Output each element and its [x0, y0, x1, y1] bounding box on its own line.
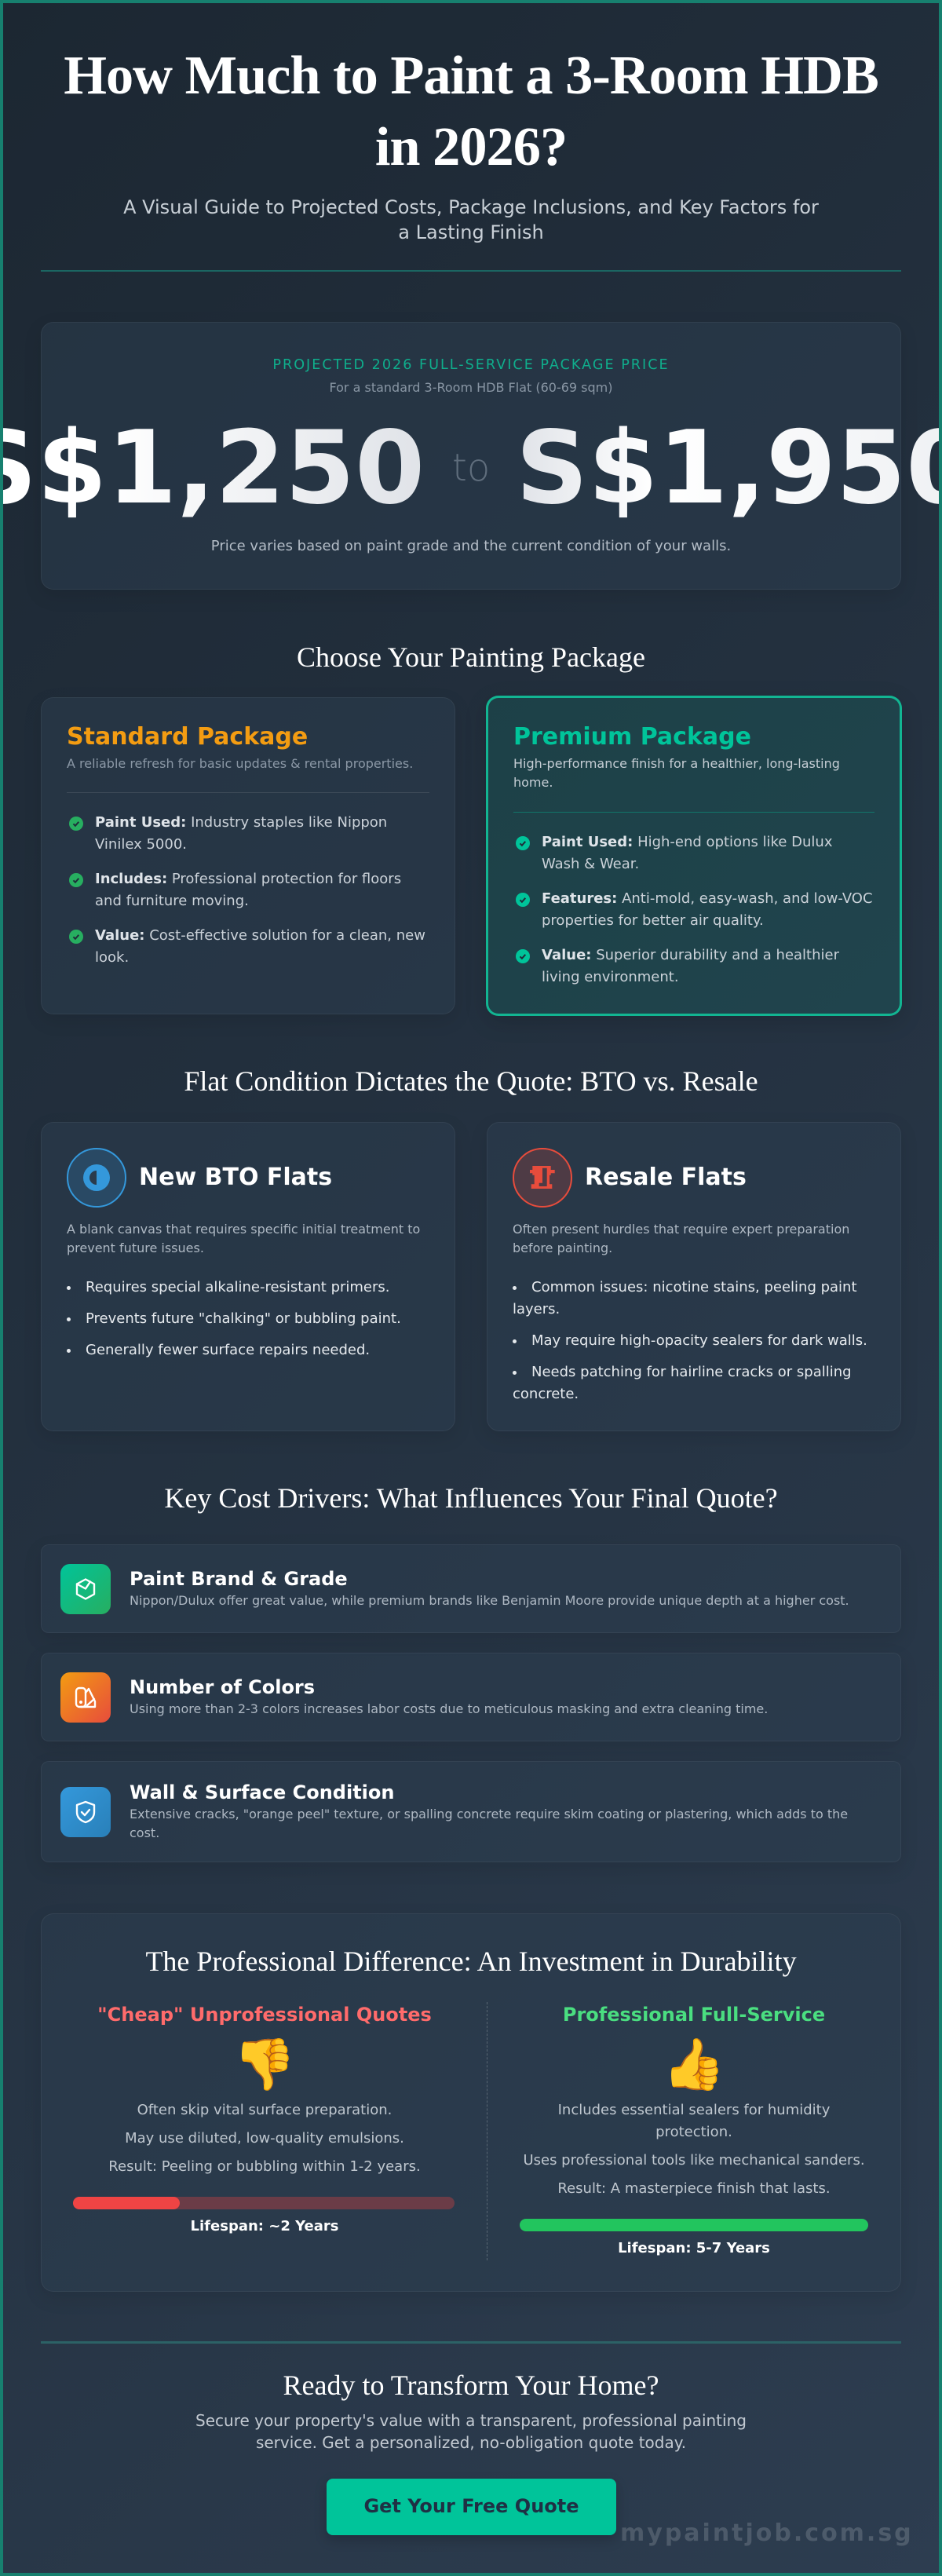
lifespan bar: 5 to 7 years [520, 2219, 868, 2231]
panel: paint brand driver [41, 1544, 901, 1633]
standard item: paint [95, 814, 387, 853]
professional points: Result: A masterpiece finish that lasts. [557, 2180, 831, 2197]
premium item: value [542, 947, 839, 985]
professional points: Includes essential sealers for humidity [558, 2102, 830, 2118]
professional column [520, 2004, 868, 2256]
wall condition title: Wall & Surface Condition [130, 1781, 394, 1803]
panel: wall condition driver [41, 1761, 901, 1862]
number of colors title: Number of Colors [130, 1676, 315, 1698]
premium item: paint: Paint Used: High-end options like Dulux [542, 834, 832, 850]
heading: cost drivers: Key Cost Drivers: What Influences Your Final Quote? [164, 1482, 778, 1514]
icon: check [516, 893, 530, 907]
premium description: High-performance finish for a healthier, long-lasting [513, 756, 840, 771]
BTO description: A blank canvas that requires specific initial treatment to [67, 1222, 420, 1237]
icon: BTO half circle [67, 1148, 126, 1208]
BTO description: prevent future issues. [67, 1240, 204, 1255]
panel: resale flats [487, 1122, 901, 1431]
standard item: includes [95, 871, 401, 909]
BTO title: New BTO Flats [139, 1164, 332, 1191]
resale list: May require high-opacity sealers for dark walls. [531, 1332, 867, 1349]
professional points: protection. [655, 2124, 732, 2140]
panel: premium package [486, 696, 902, 1016]
cheap points: Result: Peeling or bubbling within 1-2 years. [108, 2158, 421, 2175]
standard item: paint: Vinilex 5000. [95, 836, 187, 853]
panel: professional difference [41, 1913, 901, 2292]
icon: swatches [60, 1672, 111, 1723]
icon: check [69, 873, 83, 887]
premium item: features: properties for better air quality. [542, 912, 764, 929]
premium description: home. [513, 775, 553, 790]
number of colors text: Using more than 2-3 colors increases labor costs due to meticulous masking and extra cleaning time. [130, 1701, 768, 1716]
standard description: A reliable refresh for basic updates & rental properties. [67, 756, 413, 771]
resale list [513, 1279, 867, 1402]
resale description: Often present hurdles that require expert preparation [513, 1222, 849, 1237]
wall condition text [130, 1807, 848, 1840]
lifespan bar: about 2 years [73, 2197, 455, 2209]
wall condition text: cost. [130, 1825, 159, 1840]
resale list: Common issues: nicotine stains, peeling paint [531, 1279, 857, 1295]
BTO list: Generally fewer surface repairs needed. [86, 1342, 370, 1358]
button: free quote [327, 2479, 616, 2535]
lifespan label: about 2 years: Lifespan: ~2 Years [191, 2218, 338, 2234]
title: How Much to Paint a 3-Room HDB [64, 45, 878, 106]
icon: shield [60, 1787, 111, 1837]
standard item: value [95, 927, 425, 966]
title: in 2026? [375, 116, 567, 177]
call to action text: Secure your property's value with a transparent, professional painting [195, 2411, 747, 2430]
button: free quote: Get Your Free Quote [363, 2495, 579, 2517]
BTO list [67, 1279, 401, 1358]
icon: thumbs down: 👎 [233, 2035, 296, 2094]
comparison heading: The Professional Difference: An Investment in Durability [145, 1946, 797, 1977]
price note: Price varies based on paint grade and the current condition of your walls. [211, 538, 731, 554]
standard item: value: Value: Cost-effective solution for a clean, new [95, 927, 425, 944]
price label: PROJECTED 2026 FULL-SERVICE PACKAGE PRICE [272, 357, 670, 373]
premium description [513, 756, 840, 790]
icon: paint roller [513, 1148, 572, 1208]
icon: thumbs up: 👍 [663, 2035, 725, 2094]
call to action text: service. Get a personalized, no-obligation quote today. [256, 2433, 686, 2452]
premium item: features [542, 890, 873, 929]
professional points: Uses professional tools like mechanical sanders. [523, 2152, 865, 2169]
subtitle: A Visual Guide to Projected Costs, Package Inclusions, and Key Factors for [123, 196, 819, 218]
BTO description [67, 1222, 420, 1255]
BTO list: Requires special alkaline-resistant primers. [86, 1279, 390, 1295]
panel: standard package [41, 697, 455, 1014]
panel: new BTO flats [41, 1122, 455, 1431]
title [64, 45, 878, 177]
cheap points: May use diluted, low-quality emulsions. [125, 2130, 404, 2147]
price separator: to [452, 446, 490, 490]
heading: packages: Choose Your Painting Package [297, 641, 645, 673]
standard item: paint: Paint Used: Industry staples like Nippon [95, 814, 387, 831]
watermark: mypaintjob.com.sg [620, 2519, 914, 2547]
premium item: value: living environment. [542, 969, 679, 985]
panel: number of colors driver [41, 1653, 901, 1741]
wall condition text: Extensive cracks, "orange peel" texture, or spalling concrete require skim coating or plastering, which adds to the [130, 1807, 848, 1821]
standard title: Standard Package [67, 723, 308, 751]
icon: check [516, 949, 530, 963]
icon: paint box [60, 1564, 111, 1614]
icon: check [69, 930, 83, 944]
paint brand title: Paint Brand & Grade [130, 1568, 348, 1590]
price sublabel: For a standard 3-Room HDB Flat (60-69 sqm) [330, 380, 612, 395]
lifespan label: 5 to 7 years: Lifespan: 5-7 Years [618, 2240, 770, 2256]
icon: check [69, 817, 83, 831]
premium title: Premium Package [513, 723, 751, 751]
cheap points [108, 2102, 421, 2175]
cheap points: Often skip vital surface preparation. [137, 2102, 392, 2118]
professional points [523, 2102, 865, 2197]
heading: flat condition: Flat Condition Dictates the Quote: BTO vs. Resale [184, 1065, 758, 1097]
standard item: includes: Includes: Professional protection for floors [95, 871, 401, 887]
subtitle [123, 196, 819, 243]
subtitle: a Lasting Finish [398, 221, 544, 243]
call to action heading: Ready to Transform Your Home? [283, 2370, 659, 2401]
premium item: paint: Wash & Wear. [542, 856, 639, 872]
premium item: features: Features: Anti-mold, easy-wash, and low-VOC [542, 890, 873, 907]
BTO list: Prevents future "chalking" or bubbling paint. [86, 1310, 401, 1327]
resale list: Needs patching for hairline cracks or spalling [531, 1364, 852, 1380]
resale title: Resale Flats [585, 1164, 747, 1191]
standard item: includes: and furniture moving. [95, 893, 249, 909]
resale list: concrete. [513, 1386, 579, 1402]
call to action text [195, 2411, 747, 2452]
premium item: value: Value: Superior durability and a healthier [542, 947, 839, 963]
panel: projected price [41, 322, 901, 590]
paint brand text: Nippon/Dulux offer great value, while premium brands like Benjamin Moore provide unique depth at a higher cost. [130, 1593, 849, 1608]
standard item: value: look. [95, 949, 129, 966]
premium item: paint [542, 834, 832, 872]
cheap quotes column [73, 2004, 455, 2234]
icon: check [516, 836, 530, 850]
cheap title: "Cheap" Unprofessional Quotes [97, 2004, 432, 2026]
resale description: before painting. [513, 1240, 612, 1255]
resale list: layers. [513, 1301, 560, 1317]
resale description [513, 1222, 849, 1255]
professional title: Professional Full-Service [563, 2004, 825, 2026]
